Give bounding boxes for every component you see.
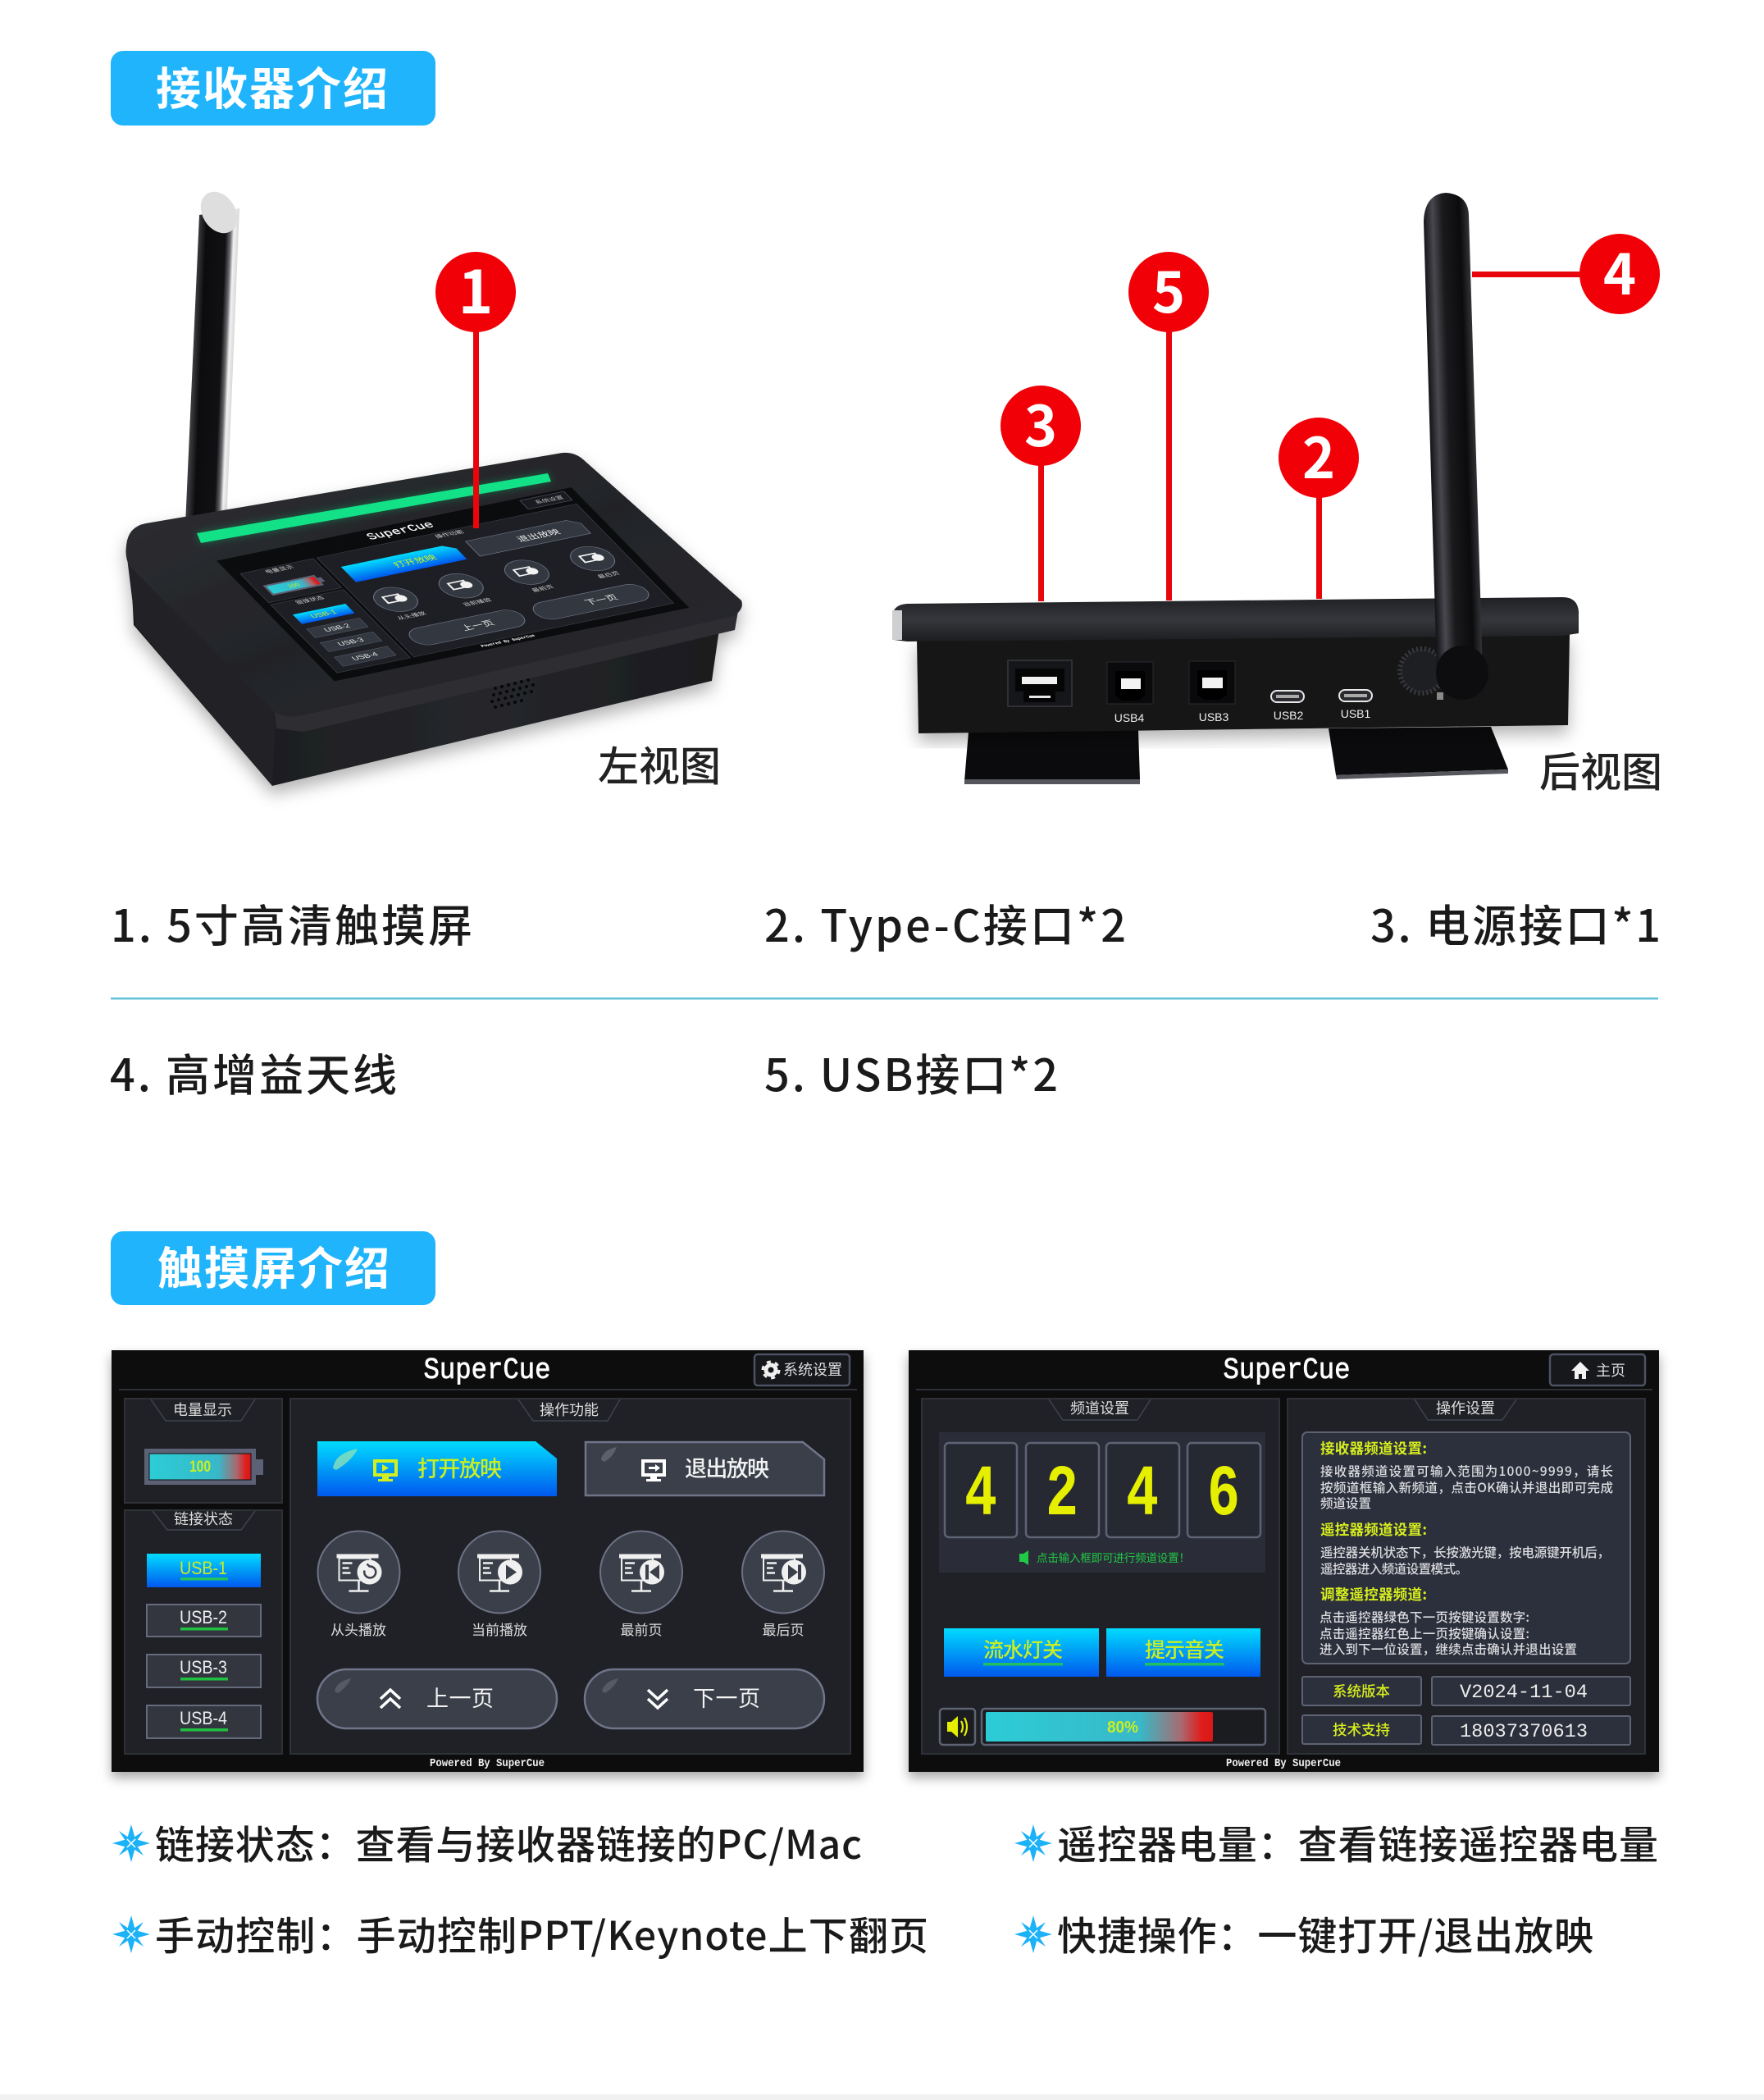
instructions text: receiver: 按频道框输入新频道，点击OK确认并退出即可完成 [1320, 1478, 1613, 1496]
callout 4 [1472, 230, 1660, 314]
device exit button [466, 518, 590, 556]
callout 1 [435, 244, 516, 528]
instructions text: receiver: 频道设置 [1320, 1494, 1371, 1512]
panel: operation settings [1288, 1397, 1645, 1754]
port USB3 [1189, 661, 1235, 724]
USB-2 [147, 1605, 261, 1637]
home button [1550, 1354, 1645, 1386]
panel: channel settings: 频道设置 [1070, 1397, 1129, 1418]
instructions text: adjust: 点击遥控器红色上一页按键确认设置: [1320, 1624, 1529, 1642]
callout 5: 5 [1152, 248, 1185, 329]
open presentation button: 打开放映 [417, 1451, 502, 1483]
speaker grille [490, 678, 535, 709]
device panels [240, 504, 673, 673]
antenna knob [1400, 649, 1444, 693]
callout 3: 3 [1024, 381, 1057, 463]
sound toggle [1106, 1628, 1260, 1677]
round button labels: 最后页 [763, 1618, 804, 1639]
device round labels: 从头播放 [395, 610, 428, 622]
volume icon [940, 1709, 975, 1745]
divider line [111, 998, 1658, 999]
panel: operations [290, 1399, 850, 1754]
feature text: manual control: 手动控制：手动控制PPT/Keynote上下翻页 [155, 1904, 928, 1961]
callout 2 [1279, 413, 1359, 599]
lights toggle [944, 1628, 1099, 1677]
USB-1 [147, 1554, 261, 1587]
heading: touchscreen intro [111, 1231, 435, 1305]
device tab labels: 链接状态 [294, 595, 326, 606]
round button: last page [742, 1531, 824, 1613]
round button: current [458, 1531, 540, 1613]
panel: battery: 电量显示 [173, 1399, 232, 1420]
bottom band [0, 2094, 1764, 2100]
exit presentation button [586, 1442, 824, 1495]
device pill buttons [403, 582, 654, 647]
callout 1: 1 [458, 244, 493, 331]
feature text: quick actions: 快捷操作：一键打开/退出放映 [1057, 1904, 1593, 1961]
port USB2: USB2 [1274, 709, 1303, 722]
tech support [1302, 1715, 1630, 1745]
spec item 2: 2. Type-C接口*2 [764, 890, 1126, 955]
icon: star bullet 3 [1014, 1824, 1052, 1862]
footer credit: Powered By SuperCue [430, 1757, 545, 1770]
instructions text: remote [1320, 1519, 1610, 1577]
caption: left view: 左视图 [598, 734, 721, 793]
spec item 1: 1. 5寸高清触摸屏 [111, 890, 472, 955]
instructions box [1302, 1432, 1630, 1664]
device usb buttons: USB-4 [350, 651, 381, 662]
device battery: 100 [285, 582, 303, 590]
device round labels: 最后页 [595, 570, 622, 580]
device round labels: 最前页 [530, 583, 556, 594]
caption: rear view: 后视图 [1539, 740, 1662, 799]
rear feet [964, 727, 1508, 784]
settings button: 系统设置 [783, 1358, 842, 1380]
panel: battery [125, 1399, 282, 1503]
digit display [939, 1432, 1265, 1573]
hint: 点击输入框即可进行频道设置！ [1037, 1549, 1190, 1565]
port USB4: USB4 [1114, 711, 1144, 724]
feature text: remote battery: 遥控器电量：查看链接遥控器电量 [1057, 1813, 1658, 1870]
panel: channel settings [922, 1397, 1279, 1754]
heading: receiver intro [111, 51, 435, 126]
battery icon [144, 1449, 263, 1485]
digit 6 [1187, 1443, 1260, 1537]
device usb buttons: USB-3 [336, 637, 367, 647]
system version [1302, 1677, 1630, 1705]
device pill buttons: 上一页 [458, 618, 497, 632]
left view device [126, 185, 742, 786]
feature text: link status: 链接状态：查看与接收器链接的PC/Mac [155, 1813, 862, 1870]
device settings button: 系统设置 [533, 494, 566, 505]
digit 4 [945, 1443, 1017, 1537]
port USB4 [1107, 662, 1153, 724]
round button labels: 当前播放 [472, 1618, 527, 1639]
tech support: 技术支持 [1333, 1719, 1390, 1740]
panel: link status [125, 1508, 282, 1754]
left antenna [185, 185, 244, 525]
footer credit: Powered By SuperCue [1226, 1757, 1341, 1770]
device round icon discs [393, 553, 606, 603]
settings button [754, 1354, 850, 1386]
battery icon: 100 [189, 1459, 211, 1476]
USB-4 [147, 1705, 261, 1738]
device screen [217, 487, 689, 681]
device pill buttons: 下一页 [581, 592, 621, 607]
digit 6: 6 [1207, 1455, 1240, 1536]
port USB3: USB3 [1199, 710, 1228, 724]
port USB1 [1339, 690, 1372, 720]
lid highlight [892, 610, 902, 640]
exit presentation button: 退出放映 [685, 1451, 769, 1483]
device exit button: 退出放映 [513, 527, 563, 544]
round button labels: 从头播放 [330, 1618, 386, 1639]
device open button [341, 544, 467, 582]
instructions text: remote: 遥控器频道设置: [1320, 1519, 1427, 1540]
touchscreen right: settings page [909, 1350, 1659, 1772]
lights toggle: 流水灯关 [983, 1634, 1063, 1664]
heading: receiver intro: 接收器介绍 [156, 52, 388, 118]
round button labels: 最前页 [620, 1618, 663, 1639]
instructions text: adjust: 进入到下一位设置，继续点击确认并退出设置 [1320, 1640, 1577, 1658]
sound toggle: 提示音关 [1145, 1634, 1224, 1664]
device round labels [395, 570, 622, 622]
instructions text: remote: 遥控器进入频道设置模式。 [1320, 1559, 1468, 1577]
power port [1008, 660, 1072, 706]
open presentation button [317, 1441, 557, 1496]
device round labels: 当前播放 [461, 596, 494, 608]
instructions text: receiver: 接收器频道设置可输入范围为1000~9999，请长 [1320, 1462, 1613, 1480]
round button: from start [318, 1531, 400, 1613]
digit 2 [1026, 1443, 1099, 1537]
panel: operation settings: 操作设置 [1436, 1397, 1495, 1418]
icon: star bullet 4 [1014, 1915, 1052, 1953]
device tab labels: 电量显示 [263, 564, 296, 575]
previous page button [317, 1669, 557, 1728]
device round buttons [366, 543, 622, 615]
volume slider [982, 1709, 1265, 1745]
green light bar [197, 473, 551, 543]
spec item 3: 3. 电源接口*1 [1370, 890, 1661, 955]
next page button [585, 1669, 824, 1728]
device usb buttons: USB-1 [308, 609, 339, 620]
rear view device [892, 193, 1579, 784]
device usb buttons: USB-2 [322, 623, 353, 633]
USB-2: USB-2 [180, 1607, 227, 1628]
round button labels [330, 1618, 804, 1639]
system version: V2024-11-04 [1460, 1682, 1588, 1703]
device footer: Powered By SuperCue [480, 633, 537, 648]
device battery [262, 574, 328, 596]
device tab labels: 操作功能 [433, 528, 466, 540]
instructions text: adjust: 点击遥控器绿色下一页按键设置数字: [1320, 1608, 1529, 1626]
device screen title: SuperCue [363, 519, 437, 542]
device round icons [382, 553, 600, 603]
panel: link status: 链接状态 [174, 1508, 233, 1529]
icon: star bullet 2 [112, 1915, 150, 1953]
device settings button [520, 491, 572, 509]
next page button: 下一页 [693, 1681, 760, 1713]
header rule [119, 1389, 857, 1390]
rear antenna [1424, 193, 1488, 700]
USB-3: USB-3 [180, 1657, 227, 1678]
round button: first page [600, 1531, 682, 1613]
panel: operations: 操作功能 [540, 1399, 599, 1420]
instructions text: adjust [1320, 1584, 1577, 1658]
callout 3 [1001, 381, 1081, 601]
digit 4: 4 [964, 1455, 997, 1536]
USB-3 [147, 1655, 261, 1687]
device tab labels [263, 528, 496, 606]
title: SuperCue [423, 1354, 551, 1387]
touchscreen left: main page [112, 1350, 864, 1772]
device body [126, 453, 742, 786]
home button: 主页 [1596, 1359, 1625, 1381]
port USB1: USB1 [1341, 707, 1370, 720]
USB-4: USB-4 [180, 1708, 227, 1728]
device usb buttons [293, 604, 396, 666]
digit 4 again: 4 [1126, 1455, 1159, 1536]
tech support: 18037370613 [1460, 1721, 1588, 1742]
port USB2 [1271, 691, 1304, 722]
digit 4 again [1106, 1443, 1179, 1537]
spec item 5: 5. USB接口*2 [764, 1039, 1058, 1104]
instructions text: receiver [1320, 1438, 1613, 1512]
callout 4: 4 [1603, 230, 1636, 311]
callout 2: 2 [1302, 413, 1335, 495]
header rule [916, 1389, 1652, 1390]
heading: touchscreen intro: 触摸屏介绍 [157, 1232, 390, 1298]
instructions text: remote: 遥控器关机状态下，长按激光键，按电源键开机后， [1320, 1543, 1610, 1561]
rear lid [892, 597, 1579, 641]
device open button: 打开放映 [390, 552, 440, 569]
digit 2: 2 [1046, 1455, 1078, 1536]
icon: star bullet 1 [112, 1824, 150, 1862]
system version: 系统版本 [1333, 1681, 1390, 1701]
spec item 4: 4. 高增益天线 [110, 1039, 397, 1104]
previous page button: 上一页 [426, 1681, 494, 1713]
volume slider: 80% [1107, 1719, 1138, 1737]
rear body [917, 633, 1570, 733]
callout 5 [1128, 248, 1209, 600]
instructions text: adjust: 调整遥控器频道: [1320, 1584, 1427, 1605]
instructions text: receiver: 接收器频道设置: [1320, 1438, 1427, 1459]
USB-1: USB-1 [180, 1558, 227, 1578]
title: SuperCue [1224, 1354, 1350, 1387]
